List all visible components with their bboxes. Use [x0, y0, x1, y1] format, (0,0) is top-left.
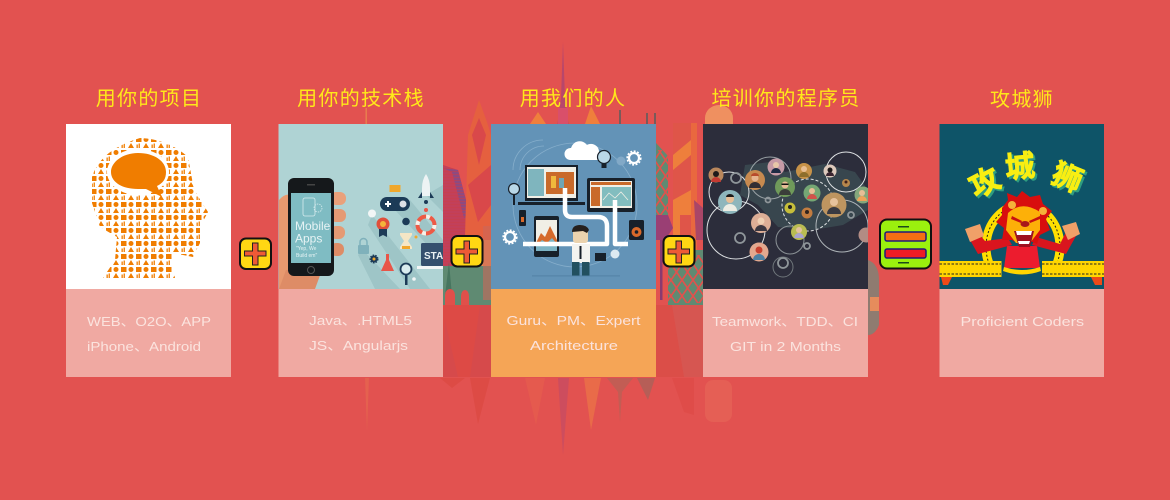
lion title shadow: 攻 — [962, 156, 1009, 209]
hand — [279, 194, 288, 289]
illustration: people network — [703, 124, 874, 289]
arch — [986, 205, 1060, 268]
world map shading — [740, 162, 868, 230]
lion title: 狮 — [1046, 149, 1090, 201]
heading: 培训你的程序员 — [711, 82, 861, 111]
text block: Guru、PM、Expert — [506, 313, 641, 328]
icon: plus 2 — [452, 236, 482, 266]
illustration: head made of icons — [66, 124, 231, 289]
heading: 用你的技术栈 — [297, 82, 425, 111]
phone: Mobile — [295, 219, 331, 233]
phone with chart — [534, 216, 559, 257]
heading: 用你的项目 — [96, 82, 202, 111]
speaker — [629, 220, 644, 240]
flat icons: STA — [424, 251, 443, 262]
text block: Architecture — [530, 338, 618, 353]
text block — [278, 289, 443, 377]
icon: equals — [880, 220, 931, 268]
illustration: lion — [940, 124, 1104, 289]
city skyline backdrop — [365, 42, 879, 455]
text block: Teamwork、TDD、CI — [712, 314, 858, 329]
lion title shadow — [970, 153, 1088, 199]
laptop — [518, 165, 585, 205]
panel: proficient coders — [940, 83, 1104, 377]
lion title: 城 — [1003, 141, 1037, 187]
man — [572, 225, 590, 276]
phone: Apps — [295, 232, 322, 246]
gear — [629, 153, 639, 163]
heading: 用我们的人 — [520, 82, 626, 111]
decorative arcs — [513, 140, 637, 267]
small nodes — [731, 173, 854, 268]
long shadows — [358, 185, 443, 289]
avatars — [708, 158, 874, 262]
heading: 攻城狮 — [990, 83, 1054, 112]
panel: your tech stack — [278, 82, 447, 377]
text block: Proficient Coders — [960, 314, 1085, 329]
white connecting pipes — [523, 188, 628, 244]
text block: Java、.HTML5 — [309, 313, 412, 328]
text block: WEB、O2O、APP — [87, 314, 211, 329]
phone — [288, 178, 334, 276]
lion title: 攻 — [960, 154, 1007, 207]
lion face — [1006, 206, 1040, 243]
magnifier — [508, 184, 520, 205]
panel: your project — [66, 82, 231, 377]
lion mane — [996, 191, 1052, 246]
text block — [66, 289, 231, 377]
panel: our people — [491, 82, 656, 377]
phone: Build em" — [296, 253, 317, 259]
illustration: devices and developer — [491, 124, 656, 289]
text block — [703, 289, 868, 377]
bulb — [598, 150, 610, 168]
text block: iPhone、Android — [87, 339, 201, 354]
cloud — [564, 141, 602, 160]
lion title shadow: 狮 — [1048, 151, 1092, 203]
flat icons — [358, 174, 447, 285]
memory card and globe — [595, 253, 606, 261]
text block — [940, 289, 1104, 377]
connection rings — [707, 152, 868, 277]
panel: train your programmers — [703, 82, 874, 377]
icon: plus 3 — [664, 236, 694, 266]
text block — [491, 289, 656, 377]
banner — [940, 261, 1104, 285]
usb — [519, 210, 526, 226]
illustration: mobile apps — [278, 124, 447, 289]
lion title shadow: 城 — [1005, 143, 1039, 189]
lion body and arms — [965, 222, 1080, 274]
icon: plus 1 — [240, 238, 271, 269]
lion title — [966, 150, 1086, 197]
text block: JS、Angularjs — [309, 338, 409, 353]
gear left — [505, 232, 515, 242]
phone: "Yep, We — [296, 246, 317, 252]
text block: GIT in 2 Months — [730, 339, 842, 354]
tablet — [587, 178, 635, 212]
ground line — [532, 274, 620, 277]
